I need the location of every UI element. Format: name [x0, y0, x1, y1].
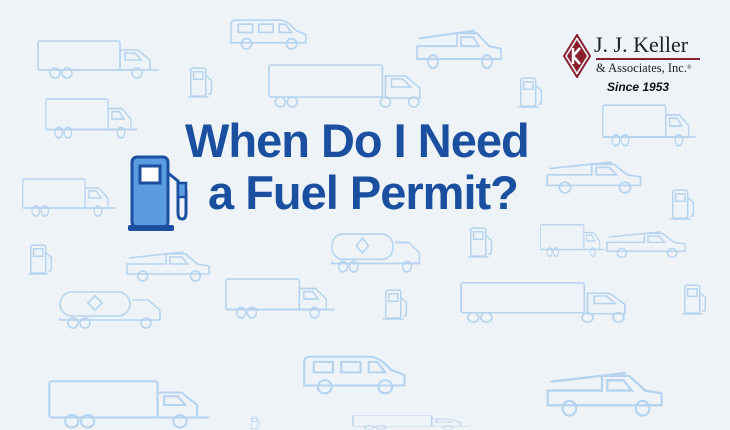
title: When Do I Need: [185, 114, 529, 167]
title: a Fuel Permit?: [208, 166, 518, 219]
title: [185, 114, 529, 219]
logo: J. J. Keller: [563, 32, 700, 94]
icon: fuel pump: [128, 156, 188, 231]
logo: J. J. Keller: & Associates, Inc.®: [596, 61, 692, 75]
icon: logo diamond: [563, 34, 591, 78]
logo: J. J. Keller: Since 1953: [607, 80, 669, 94]
logo text: J. J. Keller: [594, 32, 688, 57]
